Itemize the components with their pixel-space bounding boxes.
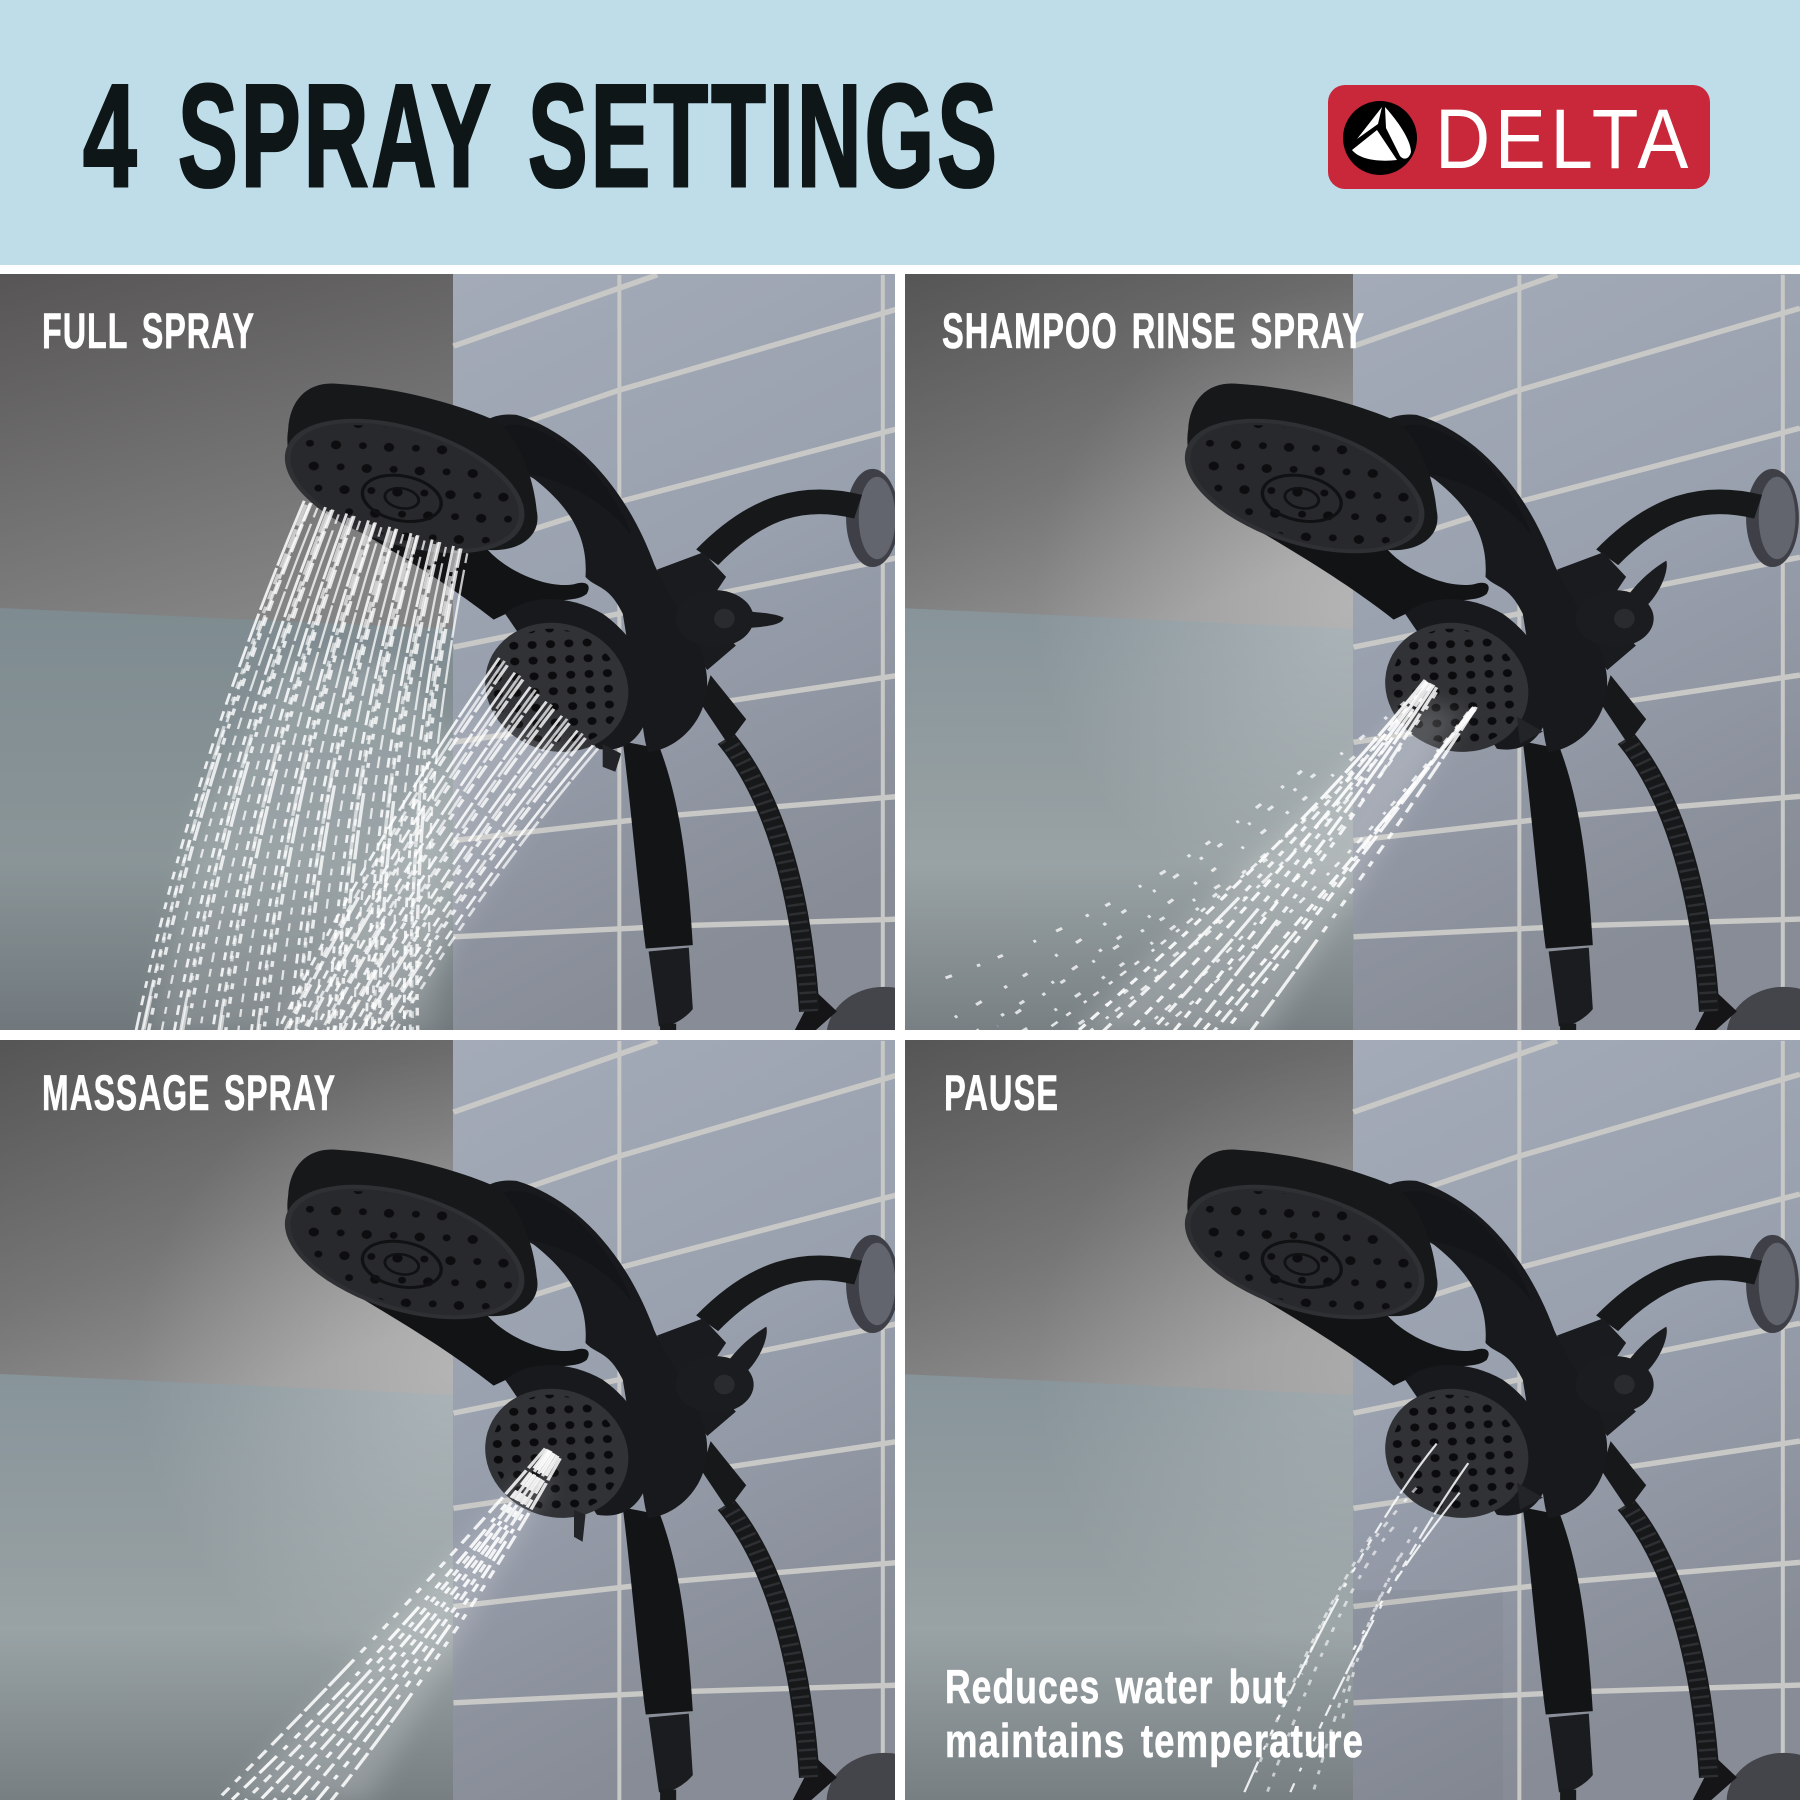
text: pause description: Reduces water but	[945, 1660, 1287, 1713]
text: pause description	[945, 1660, 1364, 1767]
title: SETTINGS	[528, 54, 1000, 217]
label: full spray: FULL SPRAY	[42, 303, 255, 359]
label: pause: PAUSE	[944, 1065, 1059, 1121]
panel: massage spray	[0, 1040, 941, 1800]
title: SPRAY	[178, 54, 494, 217]
label: shampoo rinse spray: SHAMPOO RINSE SPRAY	[942, 303, 1365, 359]
logo: Delta	[1328, 85, 1710, 189]
title: 4	[83, 54, 140, 217]
icon: raised lever	[1517, 1327, 1667, 1510]
water: concentrated jets	[923, 680, 1476, 1036]
water: massage stream	[215, 1448, 560, 1800]
panel: shampoo rinse spray	[900, 274, 1800, 1085]
icon: delta mark	[1343, 101, 1417, 175]
logo wordmark: DELTA	[1435, 92, 1693, 186]
icon: raised lever	[574, 1327, 767, 1542]
water: trickle	[1244, 1444, 1468, 1792]
label: massage spray: MASSAGE SPRAY	[42, 1065, 336, 1121]
icon: raised lever	[1517, 561, 1667, 744]
panel: pause	[900, 1040, 1800, 1800]
water: hand shower spray	[276, 658, 598, 1039]
text: pause description: maintains temperature	[945, 1714, 1364, 1767]
icon: open lever	[603, 590, 784, 772]
panel: full spray	[0, 274, 895, 1030]
header band	[0, 0, 1800, 265]
water: overhead spray	[135, 501, 468, 1039]
title	[83, 54, 1000, 217]
